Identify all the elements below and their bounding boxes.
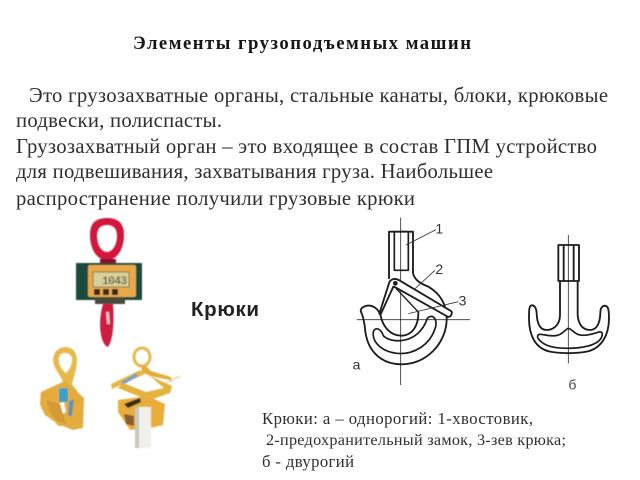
labels	[353, 221, 467, 373]
photo: crane scale with red hook	[76, 218, 142, 347]
text block: description: Грузозахватный орган – это входящее в состав ГПМ устройство	[16, 136, 597, 158]
hook body	[361, 232, 447, 364]
latch 2	[379, 279, 452, 317]
caption: б - двурогий	[262, 452, 354, 471]
title: Элементы грузоподъемных машин	[133, 33, 471, 54]
text block: description: Это грузозахватные органы, стальные канаты, блоки, крюковые	[29, 85, 608, 107]
photo: yellow scissor clamp right	[111, 348, 180, 448]
diagram: double hook b	[529, 235, 609, 393]
centre lines	[357, 218, 470, 385]
shank inner slot	[394, 232, 408, 270]
diagram: single hook a	[353, 218, 470, 385]
labels: 3	[459, 293, 467, 309]
crescent slot	[373, 316, 436, 354]
photo: crane scale with red hook: 1043	[102, 276, 127, 288]
labels: а	[353, 357, 361, 373]
hook outline	[558, 245, 579, 281]
text block: description	[16, 85, 608, 210]
leaders	[406, 230, 458, 314]
caption: Крюки: а – однорогий: 1-хвостовик,	[262, 409, 533, 428]
caption	[262, 409, 566, 471]
inner slot	[538, 328, 602, 348]
text block: description: подвески, полиспасты.	[16, 110, 222, 132]
labels: 1	[435, 221, 443, 237]
photo: yellow plate clamp left	[40, 347, 84, 430]
text block: description: для подвешивания, захватывания груза. Наибольшее	[16, 161, 493, 183]
heading: hooks label: Крюки	[191, 298, 259, 321]
labels: 2	[435, 261, 443, 277]
caption: 2-предохранительный замок, 3-зев крюка;	[266, 431, 566, 449]
text block: description: распространение получили грузовые крюки	[16, 188, 415, 210]
label: б	[568, 377, 576, 393]
